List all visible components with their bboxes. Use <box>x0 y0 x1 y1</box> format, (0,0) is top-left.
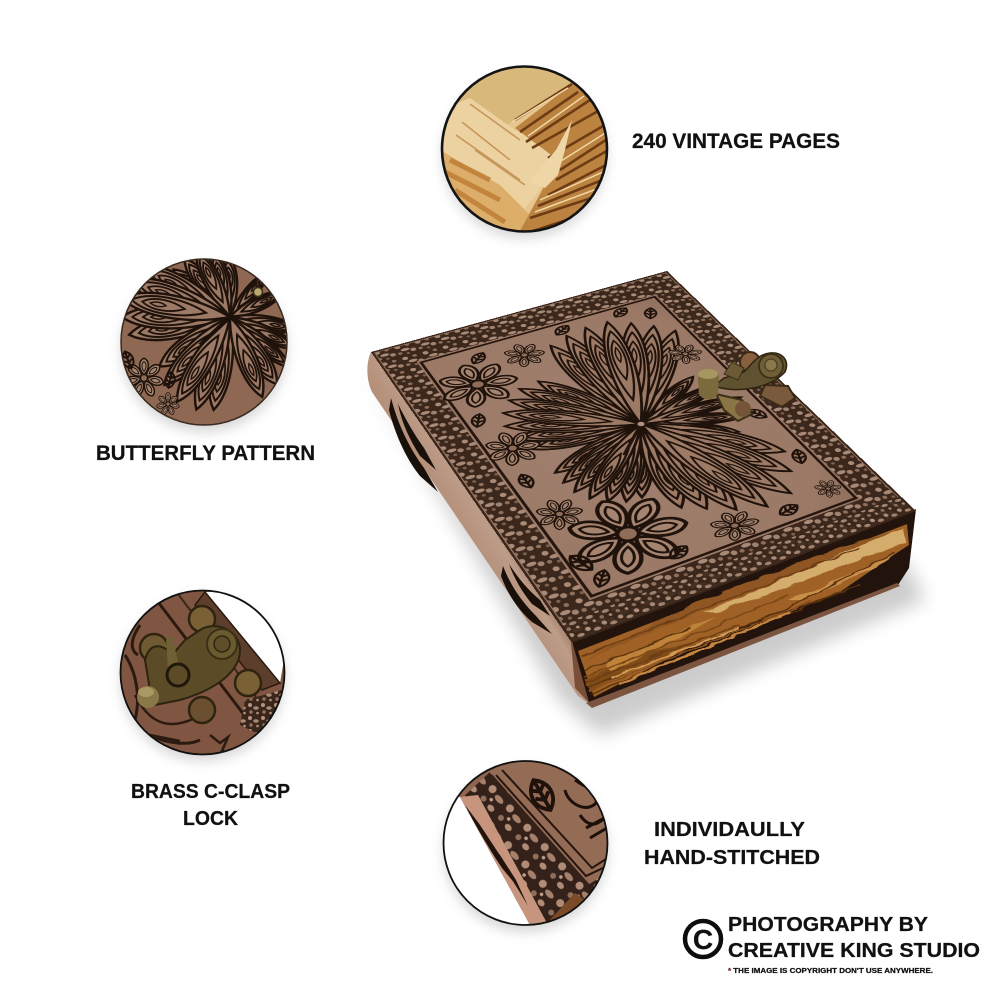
left wing <box>477 361 655 468</box>
copyright note: * THE IMAGE IS COPYRIGHT DON'T USE ANYWHERE. <box>728 966 933 975</box>
photography credit <box>728 914 980 962</box>
lower left wing <box>535 416 702 520</box>
label: brass c-clasp lock: BRASS C-CLASP <box>131 780 290 803</box>
label: butterfly pattern: BUTTERFLY PATTERN <box>96 442 315 465</box>
label: individually hand-stitched: INDIVIDAULLY <box>654 818 805 841</box>
back cover edge <box>572 509 916 706</box>
page block <box>578 524 909 697</box>
copyright icon <box>685 921 721 957</box>
circle: hand stitched spine <box>439 760 612 936</box>
cover leather <box>371 271 916 643</box>
copyright icon: C <box>693 924 713 955</box>
photography credit: PHOTOGRAPHY BY <box>728 914 929 936</box>
small flowers <box>425 304 853 596</box>
photography credit: CREATIVE KING STUDIO <box>728 940 980 962</box>
upper wing <box>533 305 750 439</box>
lower right wing <box>600 388 831 538</box>
label: individually hand-stitched <box>644 818 820 869</box>
label: brass c-clasp lock <box>131 780 290 830</box>
large flowers <box>426 344 710 594</box>
label: brass c-clasp lock: LOCK <box>183 807 238 830</box>
inner frame <box>421 297 856 596</box>
circle: vintage pages <box>440 60 612 240</box>
spine <box>367 352 592 706</box>
circle: brass clasp <box>110 590 296 770</box>
circle: butterfly pattern <box>119 246 300 432</box>
leaves <box>420 297 852 594</box>
cover with embossed butterfly <box>371 271 916 643</box>
label: 240 vintage pages: 240 VINTAGE PAGES <box>632 130 840 153</box>
label: individually hand-stitched: HAND-STITCHED <box>644 846 820 869</box>
upper right wing <box>612 366 770 461</box>
butterfly wings <box>452 305 838 568</box>
embossed border <box>375 273 911 639</box>
